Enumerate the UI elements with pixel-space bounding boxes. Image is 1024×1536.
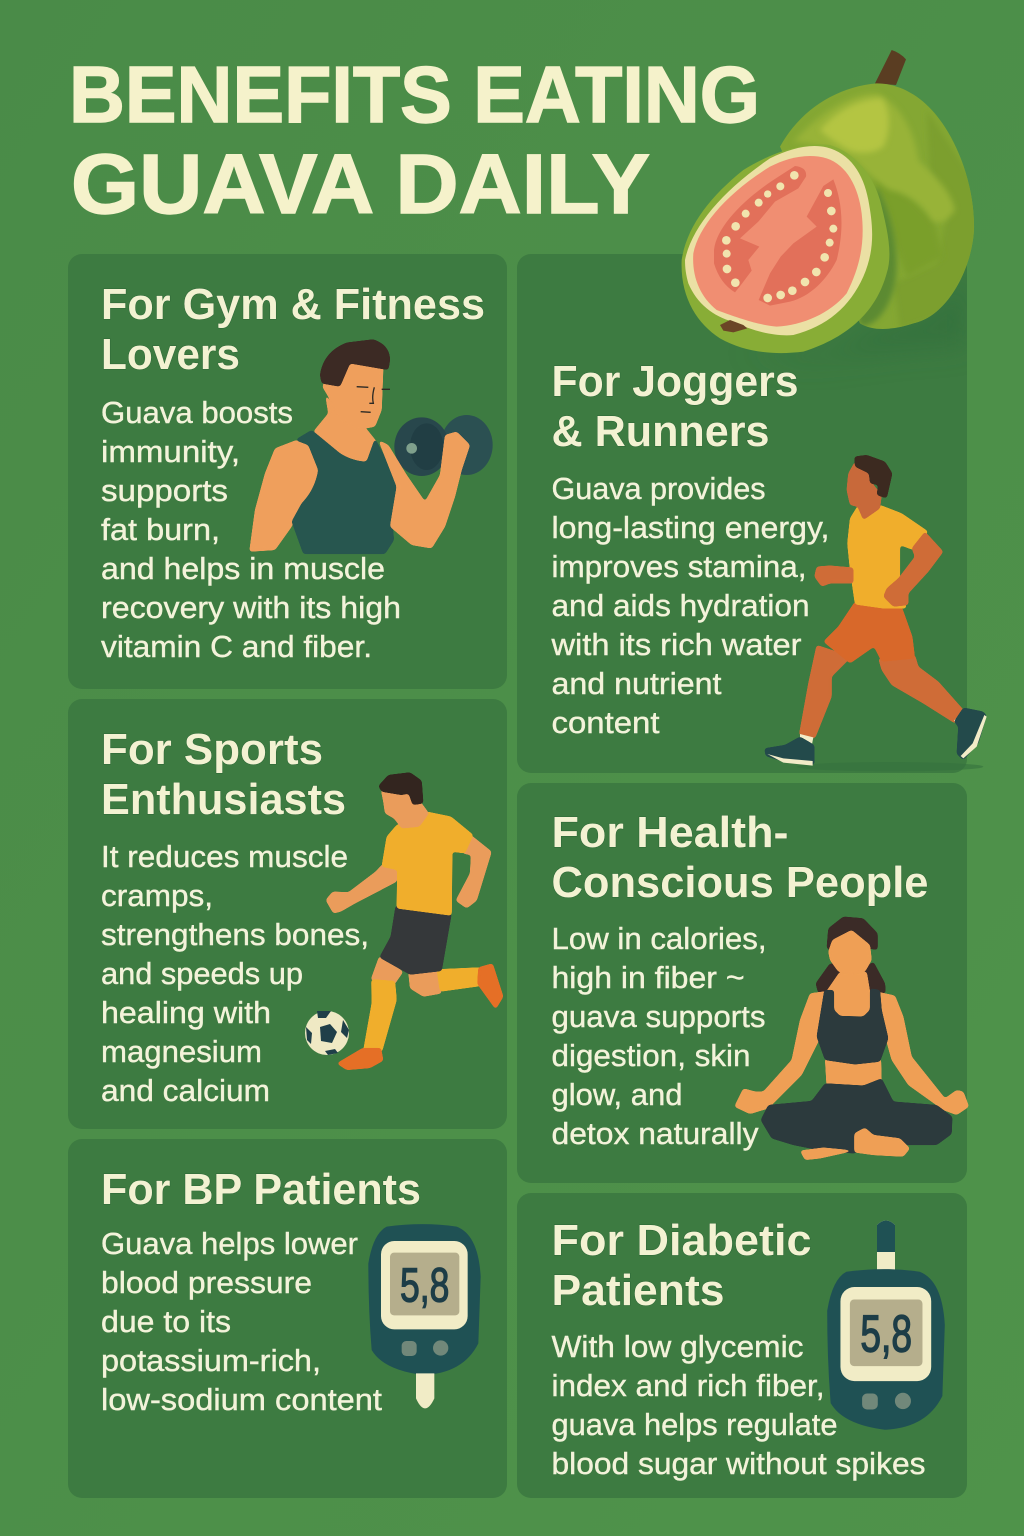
body: gym and fitness: and helps in muscle xyxy=(101,551,385,586)
guava stem xyxy=(875,50,906,85)
body: joggers and runners: improves stamina, xyxy=(552,549,806,584)
icon: BP meter: 5,8 xyxy=(400,1259,449,1313)
heading: gym and fitness xyxy=(101,280,485,379)
heading: joggers and runners: & Runners xyxy=(552,407,770,456)
body: sports enthusiasts: healing with xyxy=(101,995,271,1030)
body: BP patients: Guava helps lower xyxy=(101,1226,358,1261)
body: health-conscious people: detox naturally xyxy=(552,1116,759,1151)
heading: diabetic patients: Patients xyxy=(552,1266,724,1315)
text: health-conscious people xyxy=(552,808,928,1151)
guava shadow xyxy=(938,318,950,332)
icon: soccer ball xyxy=(305,1011,349,1055)
title xyxy=(69,50,760,231)
text: sports enthusiasts xyxy=(101,725,369,1108)
body: health-conscious people xyxy=(552,921,766,1151)
body: gym and fitness: vitamin C and fiber. xyxy=(101,629,372,664)
body: joggers and runners: Guava provides xyxy=(552,471,766,506)
body: joggers and runners: and nutrient xyxy=(552,666,722,701)
body: sports enthusiasts: strengthens bones, xyxy=(101,917,369,952)
body: gym and fitness: supports xyxy=(101,473,228,508)
body: BP patients: potassium-rich, xyxy=(101,1343,321,1378)
body: joggers and runners: with its rich water xyxy=(550,627,802,662)
body: sports enthusiasts: and speeds up xyxy=(101,956,303,991)
body: joggers and runners: content xyxy=(552,705,660,740)
body: health-conscious people: digestion, skin xyxy=(552,1038,750,1073)
cut guava half xyxy=(682,144,889,353)
heading: health-conscious people: For Health- xyxy=(552,808,788,857)
text: diabetic patients xyxy=(552,1216,926,1481)
icon: man lifting dumbbell xyxy=(249,339,493,554)
title: BENEFITS EATING xyxy=(69,50,760,139)
panel: joggers and runners background xyxy=(517,254,967,773)
body: BP patients: low-sodium content xyxy=(101,1382,382,1417)
body: sports enthusiasts xyxy=(101,839,369,1108)
body: BP patients: blood pressure xyxy=(101,1265,312,1300)
title: GUAVA DAILY xyxy=(71,137,650,231)
heading: BP patients: For BP Patients xyxy=(101,1165,421,1214)
icon: glucose meter xyxy=(827,1220,945,1430)
panel: gym and fitness background xyxy=(68,254,507,689)
body: diabetic patients xyxy=(552,1329,926,1481)
heading: health-conscious people: Conscious People xyxy=(552,858,928,907)
body: sports enthusiasts: magnesium xyxy=(101,1034,262,1069)
panel: diabetic patients background xyxy=(517,1193,967,1498)
text: BP patients xyxy=(101,1165,421,1417)
body: health-conscious people: high in fiber ~ xyxy=(552,960,744,995)
heading: diabetic patients: For Diabetic xyxy=(552,1216,812,1265)
text: joggers and runners xyxy=(550,357,830,740)
body: sports enthusiasts: and calcium xyxy=(101,1073,270,1108)
body: gym and fitness: immunity, xyxy=(101,434,240,469)
body: diabetic patients: With low glycemic xyxy=(552,1329,804,1364)
text: gym and fitness xyxy=(101,280,485,664)
heading: sports enthusiasts: Enthusiasts xyxy=(101,775,346,824)
icon: runner xyxy=(764,455,987,771)
icon: soccer player xyxy=(326,772,503,1070)
body: health-conscious people: Low in calories, xyxy=(552,921,766,956)
body: BP patients: due to its xyxy=(101,1304,231,1339)
panel: sports enthusiasts background xyxy=(68,699,507,1129)
panel: health-conscious background xyxy=(517,783,967,1183)
icon: guava fruit xyxy=(682,50,980,353)
body: health-conscious people: glow, and xyxy=(552,1077,682,1112)
heading: joggers and runners: For Joggers xyxy=(552,357,798,406)
body: gym and fitness: Guava boosts xyxy=(101,395,293,430)
body: sports enthusiasts: cramps, xyxy=(101,878,213,913)
body: sports enthusiasts: It reduces muscle xyxy=(101,839,348,874)
heading: joggers and runners xyxy=(552,357,798,456)
body: gym and fitness xyxy=(101,395,401,664)
icon: woman meditating xyxy=(734,917,969,1160)
heading: gym and fitness: For Gym & Fitness xyxy=(101,280,485,329)
icon: BP meter xyxy=(368,1224,481,1408)
panel: BP patients background xyxy=(68,1139,507,1498)
body: joggers and runners xyxy=(550,471,830,740)
body: diabetic patients: blood sugar without spikes xyxy=(552,1446,926,1481)
icon: glucose meter: 5,8 xyxy=(860,1305,912,1363)
body: gym and fitness: recovery with its high xyxy=(101,590,401,625)
body: BP patients xyxy=(101,1226,382,1417)
body: joggers and runners: and aids hydration xyxy=(552,588,810,623)
body: diabetic patients: index and rich fiber, xyxy=(552,1368,824,1403)
heading: sports enthusiasts: For Sports xyxy=(101,725,323,774)
body: gym and fitness: fat burn, xyxy=(101,512,220,547)
body: joggers and runners: long-lasting energy, xyxy=(552,510,830,545)
heading: health-conscious people xyxy=(552,808,928,907)
heading: gym and fitness: Lovers xyxy=(101,330,240,379)
whole guava xyxy=(780,83,980,330)
body: diabetic patients: guava helps regulate xyxy=(552,1407,838,1442)
body: health-conscious people: guava supports xyxy=(552,999,766,1034)
heading: diabetic patients xyxy=(552,1216,812,1315)
guava seeds xyxy=(722,171,837,302)
heading: sports enthusiasts xyxy=(101,725,346,824)
